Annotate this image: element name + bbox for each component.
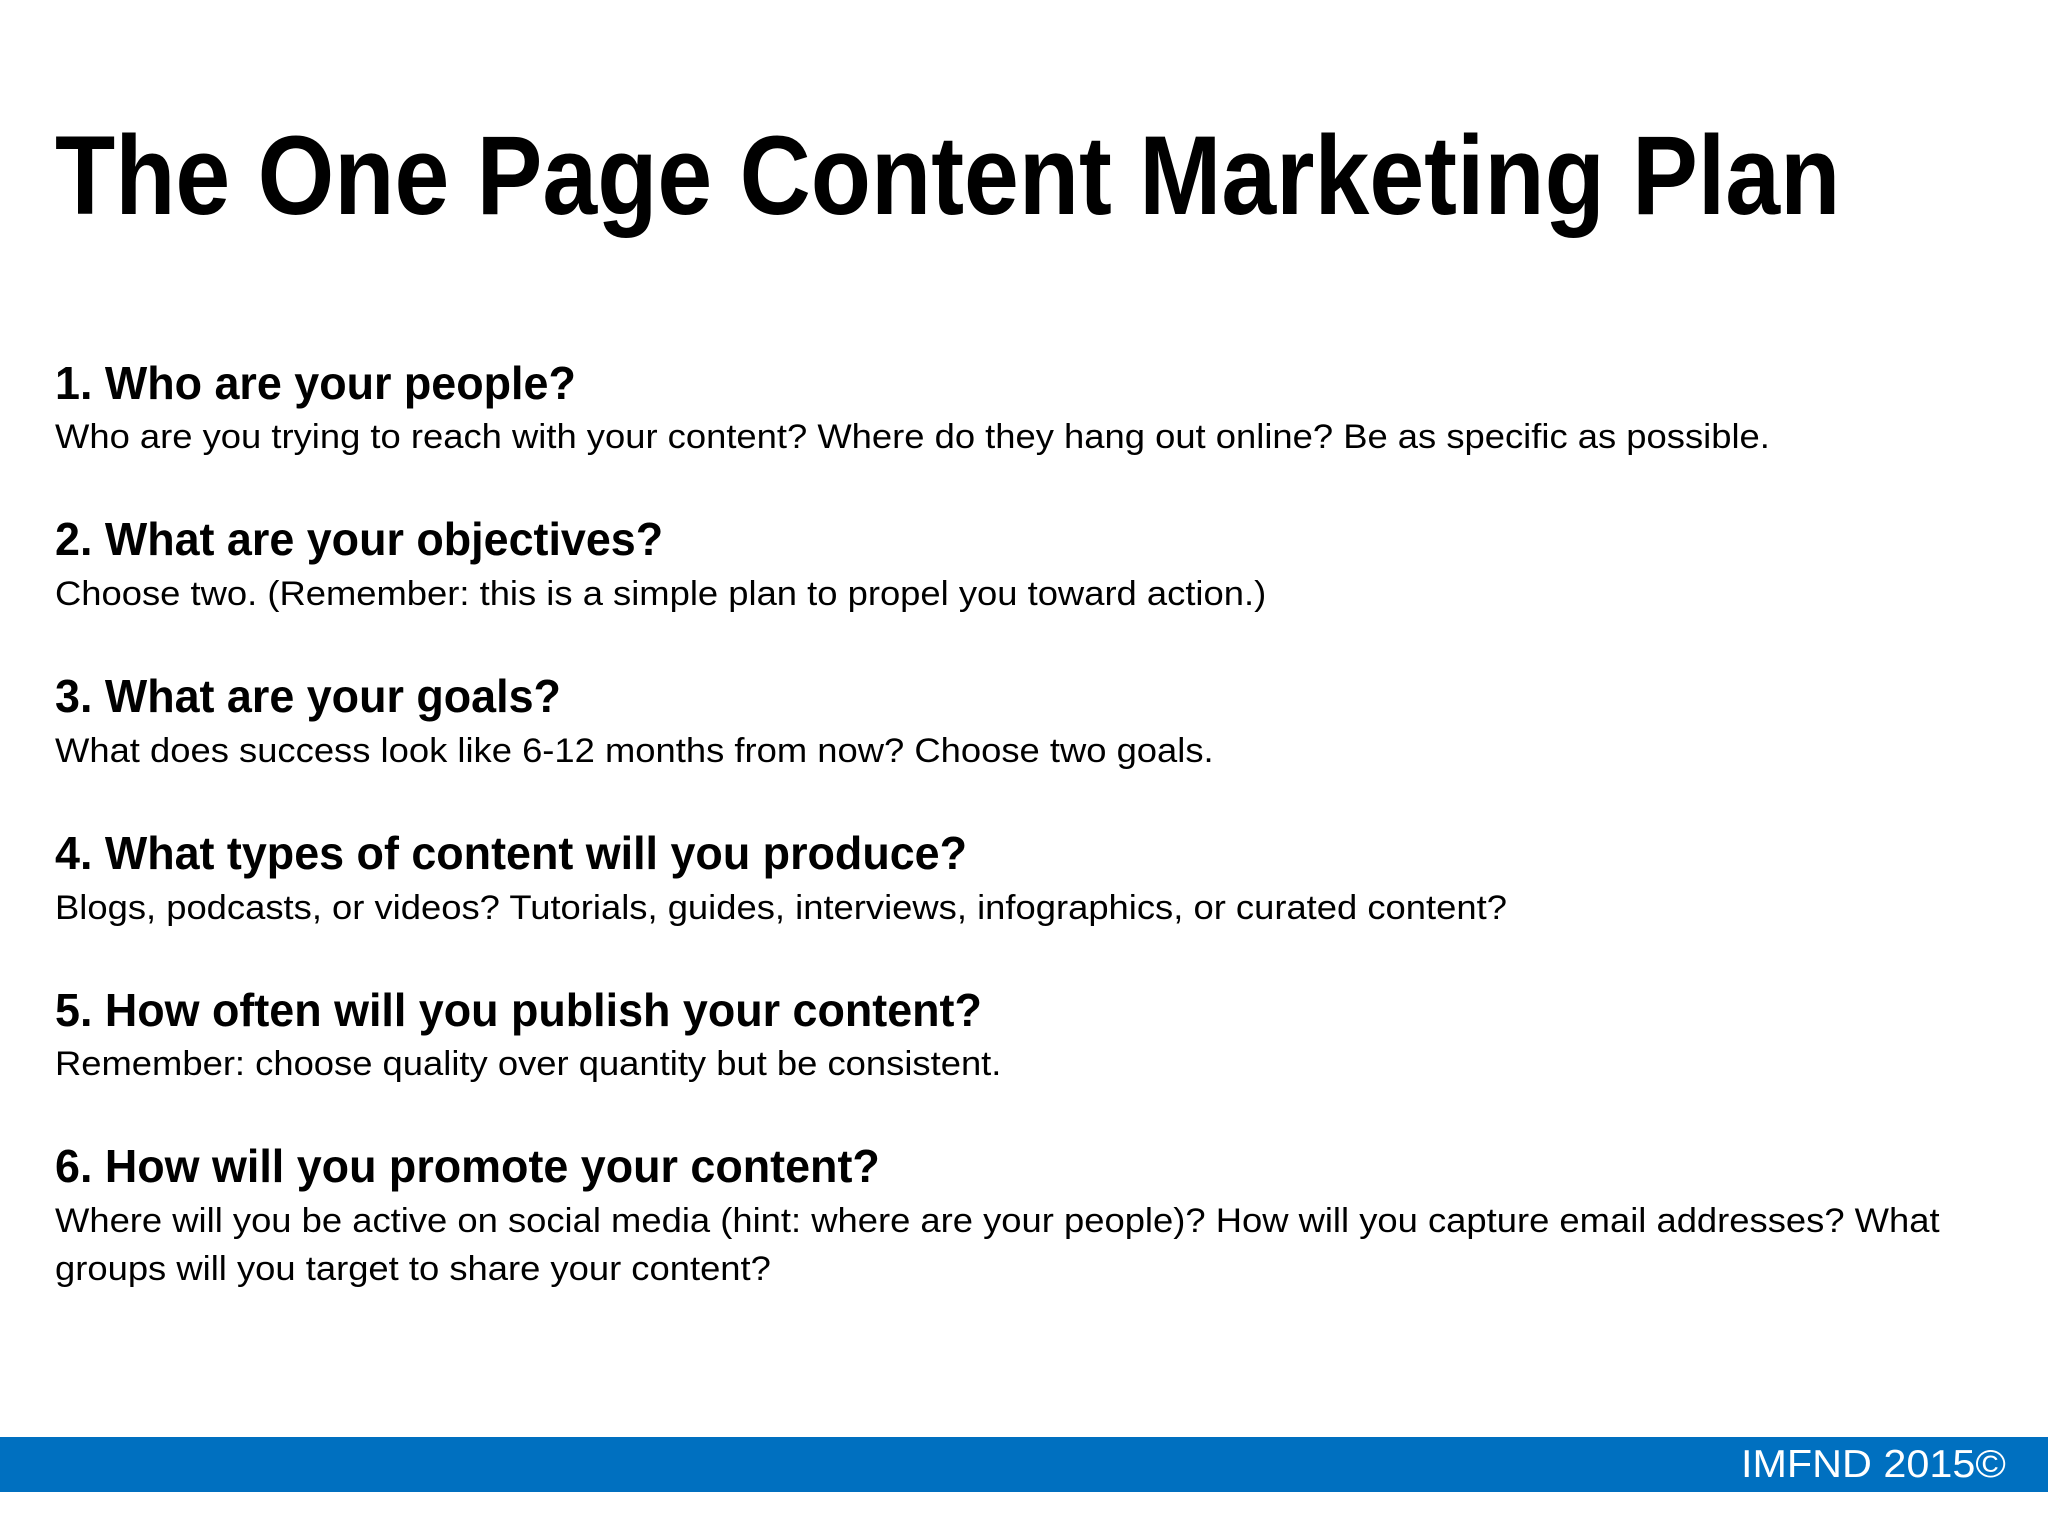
title: The One Page Content Marketing Plan	[55, 113, 1840, 238]
section 4	[55, 827, 1507, 927]
text 3: What does success look like 6-12 months from now? Choose two goals.	[55, 732, 1214, 770]
footer text: IMFND 2015©	[1741, 1443, 2006, 1486]
footer bar	[0, 1437, 2048, 1492]
text 2: Choose two. (Remember: this is a simple plan to propel you toward action.)	[55, 575, 1266, 613]
text 1: Who are you trying to reach with your content? Where do they hang out online? Be as specific as possible.	[55, 418, 1770, 456]
section 1	[55, 357, 1770, 456]
text 6: Where will you be active on social media (hint: where are your people)? How will you capture email addresses? What	[55, 1202, 1940, 1240]
heading 4: 4. What types of content will you produce?	[55, 827, 967, 879]
text 4: Blogs, podcasts, or videos? Tutorials, guides, interviews, infographics, or curated content?	[55, 889, 1507, 927]
text 6: groups will you target to share your content?	[55, 1250, 771, 1288]
heading 6: 6. How will you promote your content?	[55, 1140, 880, 1192]
heading 1: 1. Who are your people?	[55, 357, 576, 409]
text 6	[55, 1202, 1940, 1288]
heading 3: 3. What are your goals?	[55, 670, 561, 722]
section 5	[55, 984, 1001, 1083]
heading 2: 2. What are your objectives?	[55, 513, 663, 565]
heading 5: 5. How often will you publish your content?	[55, 984, 982, 1036]
section 3	[55, 670, 1214, 770]
text 5: Remember: choose quality over quantity but be consistent.	[55, 1045, 1001, 1083]
section 6	[55, 1140, 1940, 1288]
section 2	[55, 513, 1266, 613]
